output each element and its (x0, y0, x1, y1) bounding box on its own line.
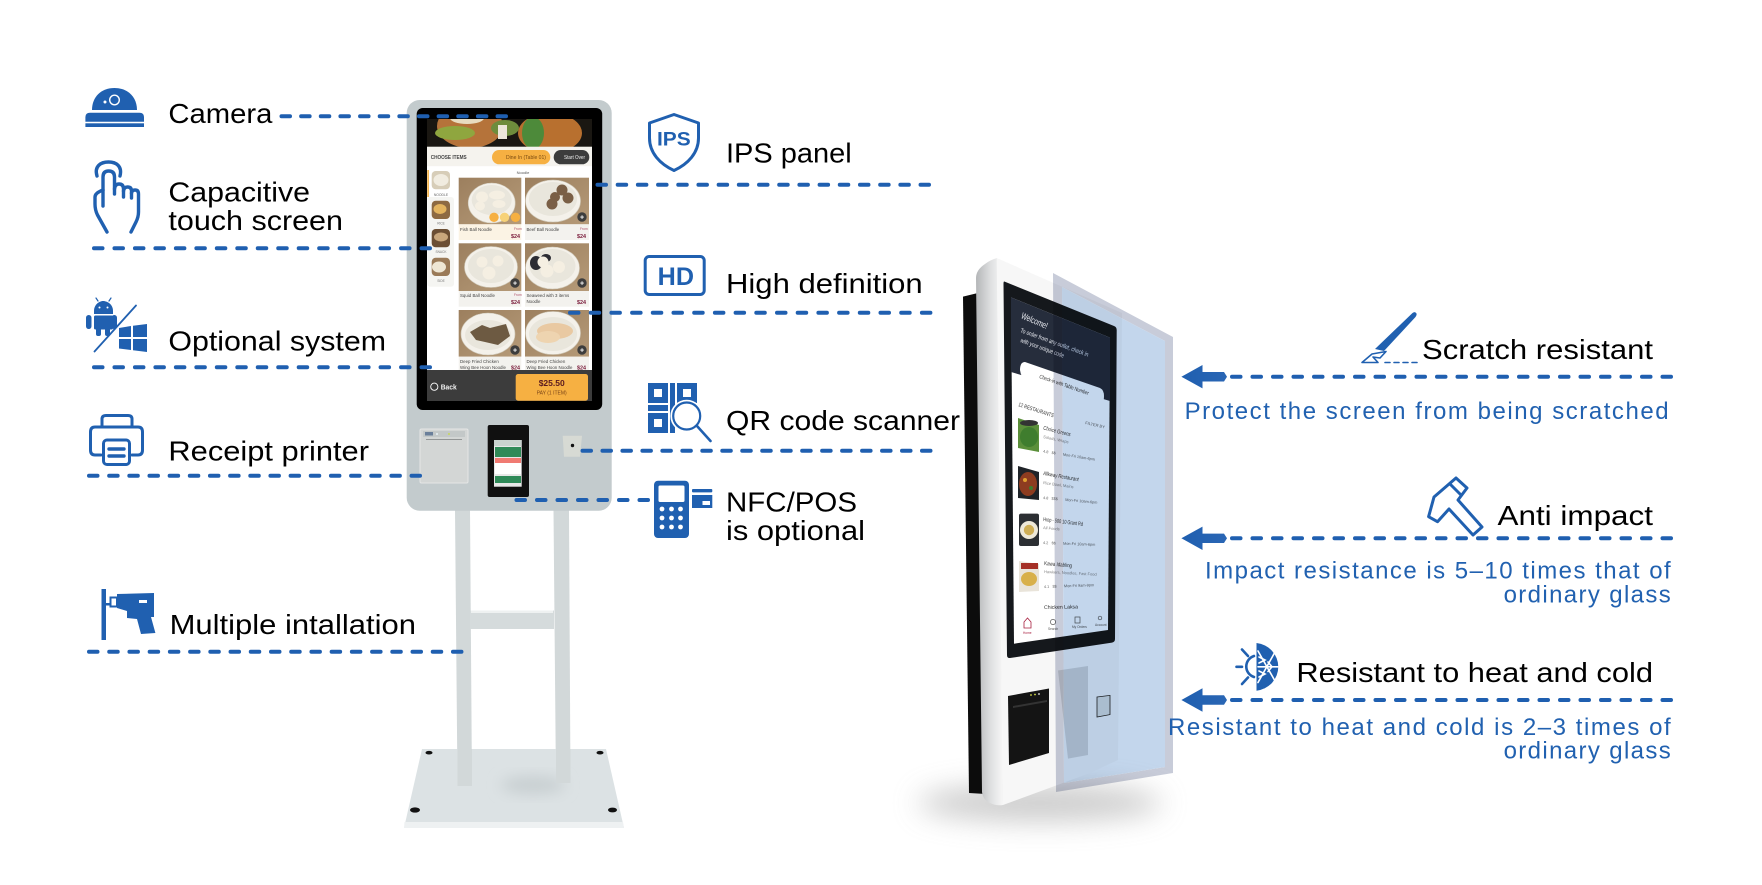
item: IPS panel (598, 114, 929, 185)
kiosk back housing (963, 292, 986, 794)
text: scratch description: Protect the screen from being scratched (1185, 398, 1669, 425)
food card: deep fried chicken A: Deep Fried Chicken (460, 359, 499, 364)
icon: drill on wall (102, 589, 155, 640)
label: High definition: High definition (726, 268, 923, 299)
kiosk stand legs (455, 510, 570, 786)
restaurant row 4: 4.1 $$ Mon-Fri 9am-9pm (1044, 583, 1094, 589)
food card: deep fried chicken B: + (580, 348, 584, 354)
panel: standing kiosk (404, 100, 624, 828)
protective glass layer (1053, 273, 1173, 792)
icon: printer (90, 416, 142, 464)
food card: beef ball noodle: From (580, 227, 588, 231)
category sidebar: SNACK (436, 250, 447, 254)
ground shadow (918, 785, 1162, 821)
food card: beef ball noodle: $24 (577, 234, 586, 240)
icon: android and windows (86, 298, 147, 352)
label: NFC/POS is optional: is optional (726, 515, 865, 546)
leader line: optional system (94, 365, 430, 369)
welcome text (1019, 311, 1090, 360)
label: Scratch resistant: Scratch resistant (1422, 334, 1653, 365)
icon: scalpel (1362, 312, 1418, 362)
restaurant row 4 (1019, 561, 1097, 592)
category sidebar: SIDE (437, 279, 445, 283)
label: Capacitive touch screen: touch screen (168, 205, 343, 236)
restaurant row 1: 4.8 $$ Mon-Fri 10am-6pm (1043, 450, 1095, 462)
food card: squid ball noodle: From (514, 293, 522, 297)
food card: squid ball noodle: + (513, 280, 517, 288)
label: NFC/POS is optional: NFC/POS (726, 487, 857, 518)
category sidebar: RICE (437, 222, 445, 226)
bottom bar with back and pay (427, 370, 592, 401)
kiosk base plate (404, 749, 624, 828)
label: QR code scanner: QR code scanner (726, 405, 960, 436)
item: scratch resistant (1181, 312, 1671, 425)
label: Multiple intallation: Multiple intallation (170, 609, 416, 640)
leader line: IPS (598, 183, 929, 187)
category sidebar (427, 170, 454, 287)
check-in pill (1020, 362, 1104, 408)
restaurant row 1 (1018, 418, 1095, 462)
banner food photo (427, 119, 592, 147)
item: capacitive touch screen (94, 162, 430, 248)
food card: beef ball noodle (525, 178, 589, 240)
item: heat and cold (1168, 643, 1671, 764)
text: impact description: ordinary glass (1504, 581, 1671, 608)
POS slot and scanner (1058, 666, 1110, 759)
text: impact description: Impact resistance is 5–10 times that of (1205, 557, 1671, 584)
text: impact description (1205, 557, 1671, 608)
restaurant list: FILTER BY (1085, 420, 1106, 430)
receipt printer slot (420, 429, 468, 483)
header bar (427, 147, 592, 166)
food card: deep fried chicken A: $24 (511, 366, 520, 372)
bottom bar with back and pay: PAY (1 ITEM) (537, 390, 567, 396)
text: heat and cold description: Resistant to heat and cold is 2–3 times of (1168, 714, 1671, 741)
food card: fish ball noodle: $24 (511, 234, 520, 240)
category sidebar: NOODLE (434, 193, 449, 197)
icon: HD: HD (658, 263, 694, 291)
restaurant row 3: All Foods (1043, 525, 1060, 531)
icon: POS terminal and card (654, 481, 712, 538)
bottom nav bar (1023, 616, 1107, 635)
bottom bar with back and pay: Back (441, 382, 457, 392)
food card: beef ball noodle: Beef Ball Noodle (526, 227, 560, 232)
welcome text: To order from any outlet, check in (1019, 327, 1090, 359)
item: optional system (86, 298, 430, 367)
food card: seaweed noodle: $24 (577, 300, 586, 306)
kiosk side bevel (976, 258, 1003, 805)
kiosk screen bezel (417, 108, 602, 410)
icon: touch hand (95, 162, 138, 232)
welcome text: with your unique code (1019, 337, 1065, 360)
restaurant list: Chicken Laksa (1044, 604, 1078, 611)
item: multiple installation (89, 589, 462, 652)
food card: fish ball noodle: Fish Ball Noodle (460, 227, 493, 232)
restaurant row 2: Rice Bowl, Mains (1043, 480, 1074, 489)
angled printer (1008, 688, 1049, 765)
kiosk screen UI (427, 104, 592, 401)
panel: left feature labels (85, 88, 506, 652)
label: Capacitive touch screen (168, 177, 343, 236)
label: IPS panel: IPS panel (726, 138, 852, 169)
kiosk body (407, 100, 612, 511)
restaurant list (1017, 402, 1106, 611)
leader line: camera (282, 114, 506, 118)
kiosk front face (997, 258, 1122, 805)
leader line: HD (570, 311, 930, 315)
text: heat and cold description (1168, 714, 1671, 764)
label: NFC/POS is optional (726, 487, 865, 546)
icon: IPS shield: IPS (657, 129, 691, 151)
food card: seaweed noodle: Noodle (526, 299, 541, 304)
restaurant row 2: 4.8 $$$ Mon-Fri 10am-6pm (1043, 496, 1098, 505)
food card: deep fried chicken B: Wing Bee Hoon Noodle (526, 365, 573, 370)
food card: deep fried chicken B (525, 310, 589, 372)
header bar: CHOOSE ITEMS (431, 155, 467, 161)
food card: deep fried chicken A (459, 310, 521, 372)
arrow: impact (1181, 527, 1671, 550)
item: receipt printer (89, 416, 420, 476)
label: Anti impact: Anti impact (1498, 500, 1653, 531)
restaurant row 3: Hrop - 500 10 Grant Rd (1043, 517, 1083, 528)
food card: deep fried chicken B: Deep Fried Chicken (526, 359, 566, 364)
food card: beef ball noodle: + (580, 214, 584, 222)
category title: Noodle (517, 170, 530, 175)
restaurant list: 12 RESTAURANTS (1017, 402, 1055, 419)
text: heat and cold description: ordinary glass (1504, 737, 1671, 764)
food card: seaweed noodle (525, 243, 589, 307)
item: anti impact (1181, 478, 1671, 608)
label: Receipt printer: Receipt printer (168, 436, 369, 467)
food card: squid ball noodle (459, 243, 522, 307)
food card: deep fried chicken B: $24 (577, 366, 586, 372)
item: High definition (570, 256, 930, 313)
item: camera (85, 88, 506, 129)
restaurant row 4: Hawkers, Noodles, Fast Food (1044, 569, 1097, 577)
panel: right glass features (1168, 312, 1671, 764)
leader line: QR (582, 449, 930, 453)
food card: seaweed noodle: + (580, 280, 584, 288)
item: QR code scanner (582, 383, 960, 451)
label: Camera: Camera (168, 98, 273, 129)
check-in pill: Check-in with Table Number (1038, 374, 1090, 397)
restaurant row 4: Kawa Idabling (1044, 561, 1072, 569)
restaurant row 2: Allkway Restaurant (1043, 471, 1079, 483)
arrow: heat and cold (1181, 688, 1671, 712)
arrow: scratch (1181, 365, 1671, 388)
leader line: installation (89, 650, 462, 654)
panel: center feature labels (516, 114, 960, 546)
label: Optional system: Optional system (168, 326, 386, 357)
restaurant row 1: Choice Greens (1043, 426, 1071, 438)
QR scanner window (563, 436, 582, 457)
food card: squid ball noodle: $24 (511, 300, 520, 306)
leader line: printer (89, 474, 420, 478)
icon: IPS shield (650, 114, 698, 170)
restaurant row 1: Salads, Wraps (1043, 434, 1069, 444)
food card: squid ball noodle: Squid Ball Noodle (460, 293, 495, 298)
icon: hammer (1429, 478, 1482, 535)
bottom nav bar: Search (1048, 627, 1058, 631)
restaurant row 3: 4.2 $$ Mon-Fri 10am-6pm (1043, 541, 1095, 547)
bottom nav bar: Account (1095, 623, 1107, 627)
bottom nav bar: Home (1023, 631, 1032, 635)
angled screen (1004, 281, 1117, 658)
label: Capacitive touch screen: Capacitive (168, 177, 310, 208)
panel: angled kiosk with protective glass (918, 258, 1173, 821)
header bar: Start Over (564, 155, 585, 161)
label: Resistant to heat and cold: Resistant to heat and cold (1296, 657, 1653, 688)
bottom bar with back and pay: $25.50 (539, 378, 565, 388)
bottom nav bar: My Orders (1072, 625, 1087, 629)
food card: fish ball noodle: From (514, 227, 522, 231)
welcome text: Welcome! (1020, 311, 1049, 331)
food card: seaweed noodle: Seaweed with 3 items (526, 293, 570, 298)
header bar: Dine In (Table 01) (506, 155, 546, 161)
icon: HD (645, 256, 704, 294)
restaurant row 2 (1018, 466, 1098, 505)
restaurant row 3 (1019, 514, 1095, 547)
food card: deep fried chicken A: + (513, 348, 517, 354)
food card: deep fried chicken A: Wing Bee Hoon Noodle (460, 365, 506, 370)
POS terminal (488, 425, 529, 497)
icon: sun and snowflake (1236, 643, 1278, 691)
leader line: NFC (516, 498, 648, 502)
icon: camera (85, 88, 144, 127)
leader line: touch (94, 246, 430, 250)
icon: QR and magnifier (648, 383, 710, 441)
item: NFC POS (516, 481, 865, 546)
food card: fish ball noodle (459, 178, 522, 240)
